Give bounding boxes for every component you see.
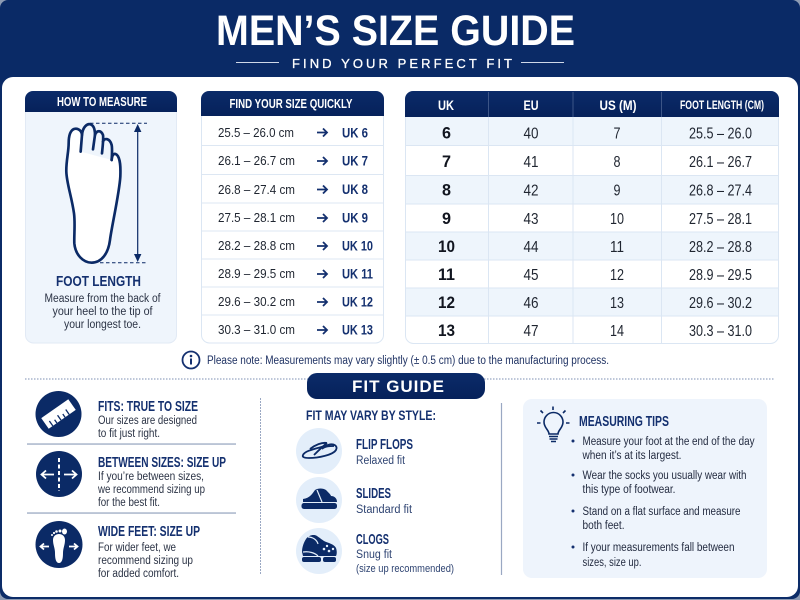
fit item: between sizes: for the best fit. <box>98 497 160 509</box>
tips list: when it’s at its largest. <box>582 450 682 462</box>
panel: find your size quickly <box>201 91 384 343</box>
tips list: Measure your foot at the end of the day <box>582 436 755 448</box>
style item: flip flops: FLIP FLOPS <box>356 436 413 453</box>
table header: US (M) <box>600 97 636 113</box>
how to measure heading: HOW TO MEASURE <box>57 94 147 109</box>
style item: clogs: CLOGS <box>356 531 389 548</box>
table header: FOOT LENGTH (CM) <box>680 98 764 112</box>
subtitle: FIND YOUR PERFECT FIT <box>292 56 512 71</box>
style item: clogs <box>296 528 454 575</box>
icon: foot outline <box>66 124 120 263</box>
table rows: 14 <box>610 323 624 340</box>
fit item: wide feet: for added comfort. <box>98 568 179 580</box>
table rows: 6 <box>442 124 451 142</box>
table rows: 46 <box>524 295 539 312</box>
table rows: 30.3 – 31.0 <box>689 323 752 340</box>
fit item: wide feet <box>36 521 200 580</box>
callout: measurement note: Please note: Measurements may vary slightly (± 0.5 cm) due to the manufacturing process. <box>207 355 609 367</box>
icon: arrows apart <box>36 451 82 497</box>
callout: measurement note <box>182 352 609 368</box>
table rows: 9 <box>442 209 451 228</box>
tips list: sizes, size up. <box>582 557 642 569</box>
fit item: wide feet: recommend sizing up <box>98 555 193 567</box>
quick lookup rows: UK 9 <box>342 210 368 226</box>
foot length label: FOOT LENGTH <box>56 273 141 290</box>
quick lookup rows: UK 6 <box>342 124 368 140</box>
quick lookup arrows <box>317 128 327 334</box>
table rows: 8 <box>614 154 621 171</box>
fit item: true to size: FITS: TRUE TO SIZE <box>98 398 198 415</box>
fit item: between sizes: we recommend sizing up <box>97 484 205 496</box>
table rows: 10 <box>610 211 624 228</box>
table rows: 47 <box>524 323 539 340</box>
quick lookup rows: UK 7 <box>342 152 368 168</box>
panel: fit by style <box>296 407 454 575</box>
icon: flip flop <box>296 428 342 474</box>
table rows: 12 <box>610 267 624 284</box>
quick lookup heading <box>201 91 384 116</box>
how to measure heading <box>25 91 177 112</box>
icon: clog <box>296 528 342 574</box>
panel: measuring tips <box>523 399 767 578</box>
table rows: 43 <box>524 211 539 228</box>
style item: slides <box>296 477 413 523</box>
table rows: 11 <box>610 239 624 256</box>
quick lookup rows: 29.6 – 30.2 cm <box>218 294 295 309</box>
fit item: true to size <box>36 391 198 440</box>
title: MEN’S SIZE GUIDE <box>216 7 575 55</box>
panel: how to measure <box>25 91 177 343</box>
icon: wide foot <box>36 521 82 568</box>
quick lookup rows: 28.2 – 28.8 cm <box>218 238 295 253</box>
quick lookup rows: 25.5 – 26.0 cm <box>218 125 294 140</box>
quick lookup rows: 30.3 – 31.0 cm <box>218 322 295 337</box>
icon: length arrow <box>90 123 147 263</box>
table rows: 44 <box>524 239 539 256</box>
fit item: between sizes: If you’re between sizes, <box>98 471 204 483</box>
table rows: 28.9 – 29.5 <box>689 267 752 284</box>
fit item: true to size: Our sizes are designed <box>98 415 197 427</box>
table rows: 27.5 – 28.1 <box>689 211 752 228</box>
icon: light bulb <box>537 406 570 442</box>
table rows: 41 <box>524 154 539 171</box>
tips heading: MEASURING TIPS <box>579 413 669 430</box>
quick lookup rows: 27.5 – 28.1 cm <box>218 210 295 225</box>
heading: fit guide: FIT GUIDE <box>352 377 444 396</box>
quick lookup rows: UK 8 <box>342 181 368 197</box>
table rows: 26.8 – 27.4 <box>689 182 752 200</box>
table rows: 11 <box>438 265 455 284</box>
table rows: 9 <box>614 182 621 200</box>
table rows: 8 <box>442 180 451 200</box>
table rows: 42 <box>524 182 539 200</box>
quick lookup heading: FIND YOUR SIZE QUICKLY <box>230 96 353 111</box>
tips list: both feet. <box>582 520 624 532</box>
table rows: 7 <box>614 126 621 142</box>
style item: flip flops <box>296 428 413 474</box>
quick lookup rows: 26.8 – 27.4 cm <box>218 182 295 197</box>
style heading: FIT MAY VARY BY STYLE: <box>306 407 436 423</box>
quick lookup rows: 28.9 – 29.5 cm <box>218 266 295 281</box>
quick lookup rows: UK 13 <box>342 322 373 338</box>
table rows: 45 <box>524 267 539 284</box>
tips list <box>572 436 755 569</box>
fit item: wide feet: WIDE FEET: SIZE UP <box>98 523 200 540</box>
table rows <box>438 124 752 340</box>
heading: fit guide <box>307 373 485 399</box>
table rows: 25.5 – 26.0 <box>689 126 752 142</box>
panel: size chart table <box>405 91 779 344</box>
tips list: Wear the socks you usually wear with <box>582 470 746 482</box>
quick lookup rows: UK 12 <box>342 294 373 310</box>
style item: clogs: Snug fit <box>356 549 393 561</box>
foot length description <box>44 293 161 331</box>
quick lookup rows: UK 10 <box>342 238 373 254</box>
table rows: 10 <box>438 237 455 256</box>
style item: flip flops: Relaxed fit <box>356 455 406 467</box>
table header <box>405 91 779 117</box>
style item: slides: SLIDES <box>356 485 391 502</box>
quick lookup rows <box>218 124 373 338</box>
tips list: Stand on a flat surface and measure <box>582 506 740 518</box>
table rows: 40 <box>524 126 539 142</box>
fit item: between sizes <box>36 451 226 509</box>
table header: EU <box>524 97 538 113</box>
icon: info <box>182 352 200 368</box>
fit item: wide feet: For wider feet, we <box>98 542 176 554</box>
panel: fit advice <box>27 391 236 580</box>
table rows: 26.1 – 26.7 <box>689 154 752 171</box>
tips list: If your measurements fall between <box>582 542 734 554</box>
foot length description: your longest toe. <box>64 319 141 331</box>
quick lookup rows: UK 11 <box>342 266 373 282</box>
table header: UK <box>438 97 454 113</box>
foot length description: Measure from the back of <box>44 293 161 305</box>
style item: slides: Standard fit <box>356 504 413 516</box>
icon: ruler <box>36 391 82 437</box>
fit item: between sizes: BETWEEN SIZES: SIZE UP <box>98 454 226 471</box>
table rows: 13 <box>610 295 624 312</box>
foot length description: your heel to the tip of <box>52 306 153 318</box>
quick lookup rows: 26.1 – 26.7 cm <box>218 153 295 168</box>
table rows: 13 <box>438 321 455 340</box>
tips list: this type of footwear. <box>582 484 676 496</box>
fit item: true to size: to fit just right. <box>98 428 160 440</box>
table rows: 29.6 – 30.2 <box>689 295 752 312</box>
style item: clogs: (size up recommended) <box>356 563 454 575</box>
table rows: 12 <box>438 293 455 312</box>
table rows: 28.2 – 28.8 <box>689 239 752 256</box>
icon: slide <box>296 477 342 523</box>
table rows: 7 <box>442 152 451 171</box>
